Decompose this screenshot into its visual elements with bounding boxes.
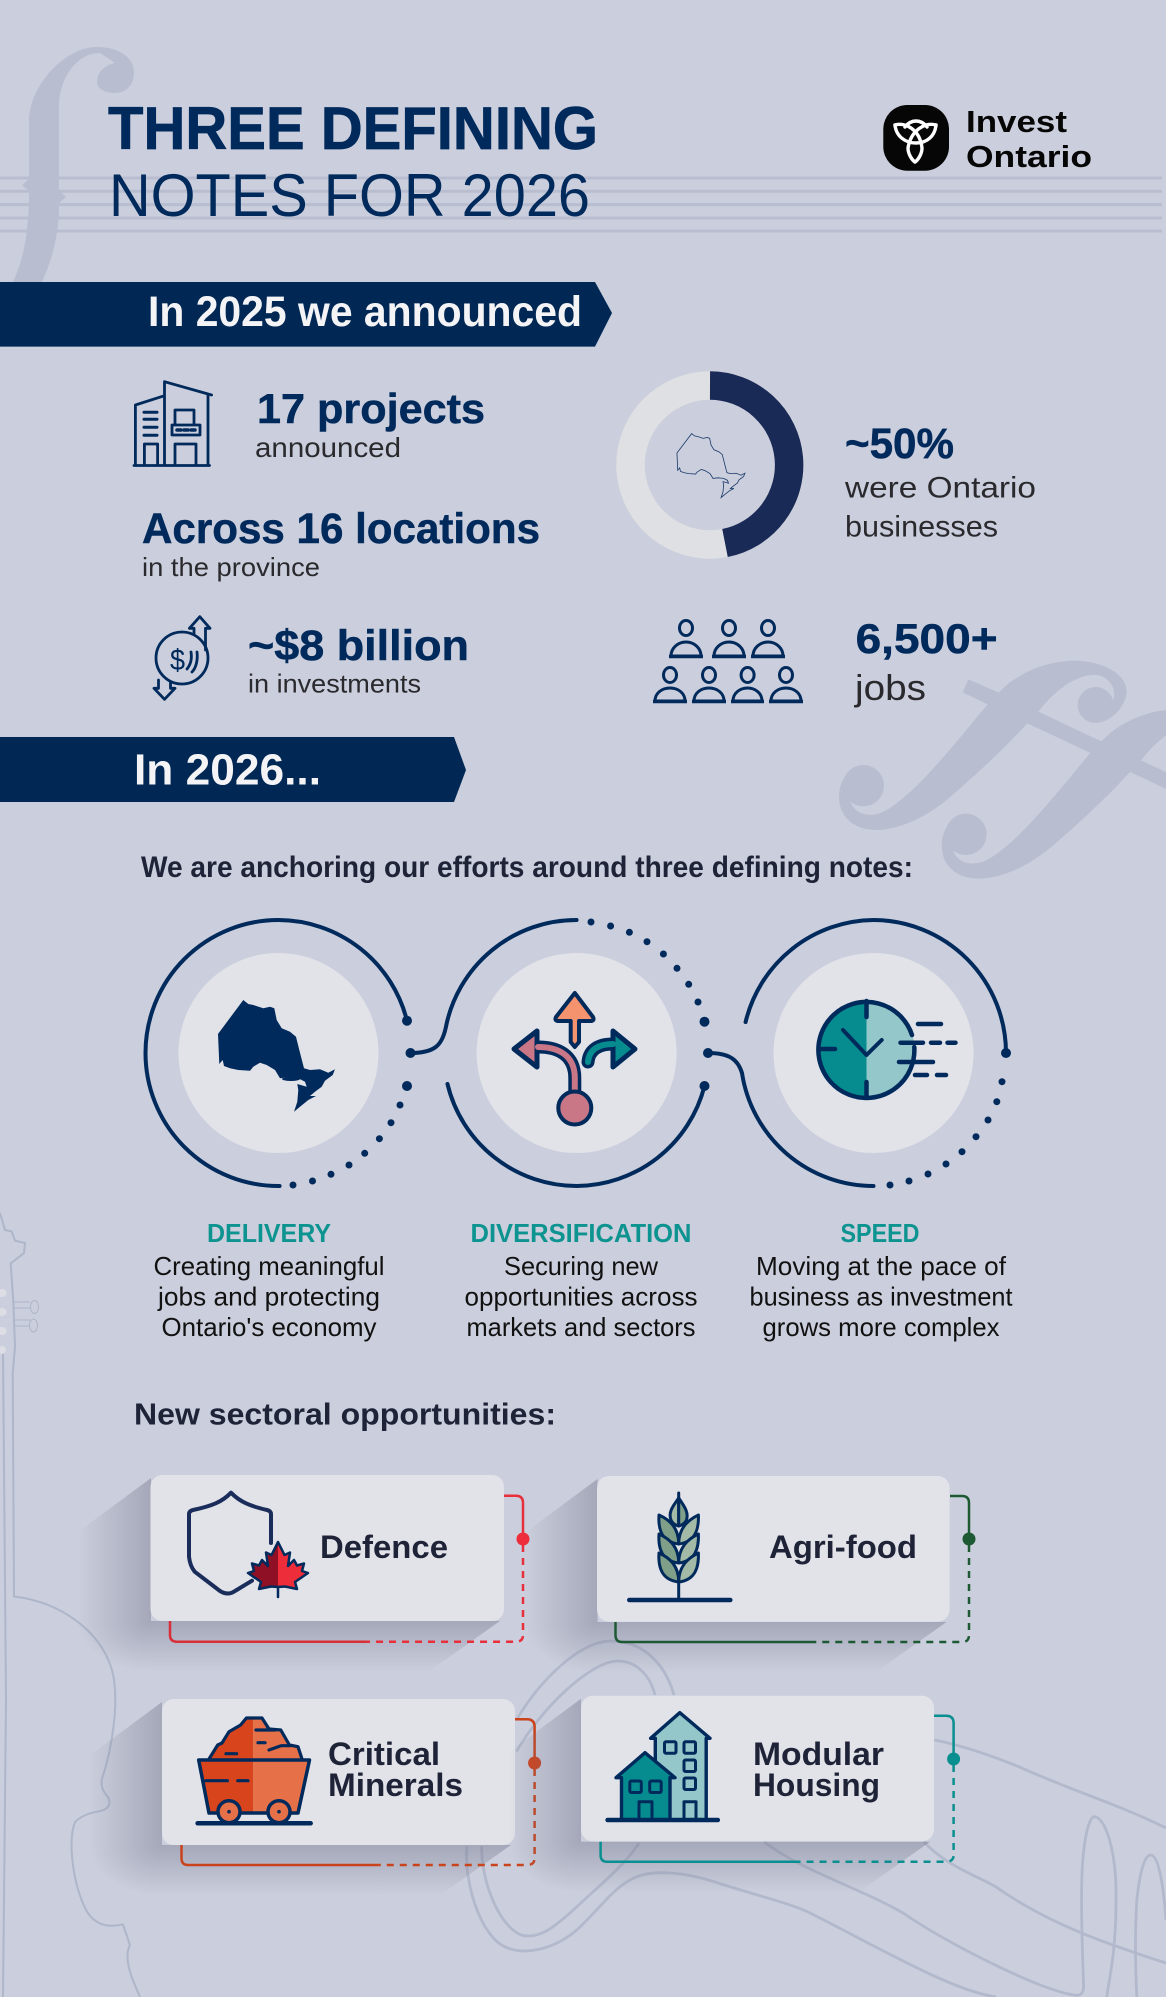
card: Critical Minerals xyxy=(89,1699,541,1896)
card: Modular Housing: Housing xyxy=(753,1767,880,1803)
title: THREE DEFINING xyxy=(108,95,598,162)
stat: 6,500+ jobs xyxy=(854,615,998,708)
icon: houses xyxy=(608,1713,718,1820)
label: diversification: opportunities across xyxy=(464,1282,698,1312)
stat: 17 projects xyxy=(255,385,485,463)
icon: Ontario map xyxy=(218,1000,335,1112)
label: delivery: Ontario's economy xyxy=(162,1312,376,1342)
card: Defence: Defence xyxy=(320,1529,448,1565)
icon: shield and maple leaf xyxy=(189,1493,308,1597)
icon: money with arrows xyxy=(154,617,210,699)
label: delivery xyxy=(154,1218,384,1342)
stat: ~$8 billion: in investments xyxy=(248,669,421,699)
stat: 6,500+ jobs: 6,500+ xyxy=(856,615,998,662)
stat: ~50% xyxy=(844,420,1036,544)
label: diversification: markets and sectors xyxy=(466,1312,696,1342)
stat: Across 16 locations: in the province xyxy=(142,552,320,582)
card: Critical Minerals: Critical xyxy=(328,1736,440,1772)
background: violin scroll lines xyxy=(467,1641,1166,1997)
label: speed xyxy=(750,1218,1013,1342)
background: staff lines xyxy=(0,178,1162,231)
label: diversification: DIVERSIFICATION xyxy=(470,1218,692,1248)
title: NOTES FOR 2026 xyxy=(109,162,590,229)
icon: diverging arrows xyxy=(514,993,635,1124)
donut chart: ~50% Ontario businesses xyxy=(630,386,790,544)
icon: wheat xyxy=(629,1493,730,1600)
logo: Invest Ontario: Ontario xyxy=(966,139,1092,174)
label: speed: SPEED xyxy=(840,1218,920,1248)
label: diversification: Securing new xyxy=(504,1251,658,1281)
map: Ontario outline xyxy=(677,434,745,497)
banner: In 2025 we announced xyxy=(0,282,612,347)
logo: Invest Ontario: Invest xyxy=(966,104,1067,139)
card: Modular Housing xyxy=(508,1696,960,1893)
icon: ore cart xyxy=(198,1718,311,1823)
background: violin outline xyxy=(0,1213,140,1997)
icon: speed clock xyxy=(818,1001,956,1098)
stat: Across 16 locations: Across 16 locations xyxy=(142,505,540,553)
card: Modular Housing: Modular xyxy=(753,1736,884,1772)
card: Agri-food: Agri-food xyxy=(769,1529,917,1565)
label: delivery: DELIVERY xyxy=(207,1218,331,1248)
title xyxy=(108,95,598,229)
label: speed: business as investment xyxy=(750,1282,1013,1312)
banner: In 2025 we announced: In 2025 we announced xyxy=(148,288,582,336)
label: diversification xyxy=(464,1218,698,1342)
stat: 17 projects: announced xyxy=(255,432,401,463)
label: delivery: Creating meaningful xyxy=(154,1251,384,1281)
stat: 17 projects: 17 projects xyxy=(257,385,485,432)
card: Defence xyxy=(78,1475,530,1672)
stat: ~$8 billion: ~$8 billion xyxy=(248,622,469,670)
card: Agri-food xyxy=(524,1476,976,1673)
card: Critical Minerals: Minerals xyxy=(328,1767,463,1803)
logo: Invest Ontario xyxy=(883,104,1092,174)
background: top f-hole xyxy=(13,47,134,282)
heading: three defining notes: We are anchoring our efforts around three defining notes: xyxy=(141,851,913,884)
stat: Across 16 locations xyxy=(142,505,540,582)
stat: ~$8 billion xyxy=(248,622,469,699)
diagram: connected circles xyxy=(146,918,1011,1188)
stat: ~50%: businesses xyxy=(845,511,998,544)
stat: 6,500+ jobs: jobs xyxy=(854,667,926,708)
label: speed: Moving at the pace of xyxy=(756,1251,1007,1281)
icon: people group xyxy=(653,620,803,702)
icon: building xyxy=(134,382,212,466)
icon: money with arrows: $ xyxy=(170,644,185,677)
banner: In 2026 xyxy=(0,737,466,802)
label: delivery: jobs and protecting xyxy=(157,1282,380,1312)
background: large f-holes xyxy=(839,661,1166,879)
label: speed: grows more complex xyxy=(762,1312,1000,1342)
stat: ~50%: were Ontario xyxy=(844,472,1036,505)
stat: ~50%: ~50% xyxy=(845,420,954,468)
heading: new sectoral opportunities: New sectoral opportunities: xyxy=(134,1396,556,1432)
banner: In 2026: In 2026... xyxy=(134,746,321,794)
